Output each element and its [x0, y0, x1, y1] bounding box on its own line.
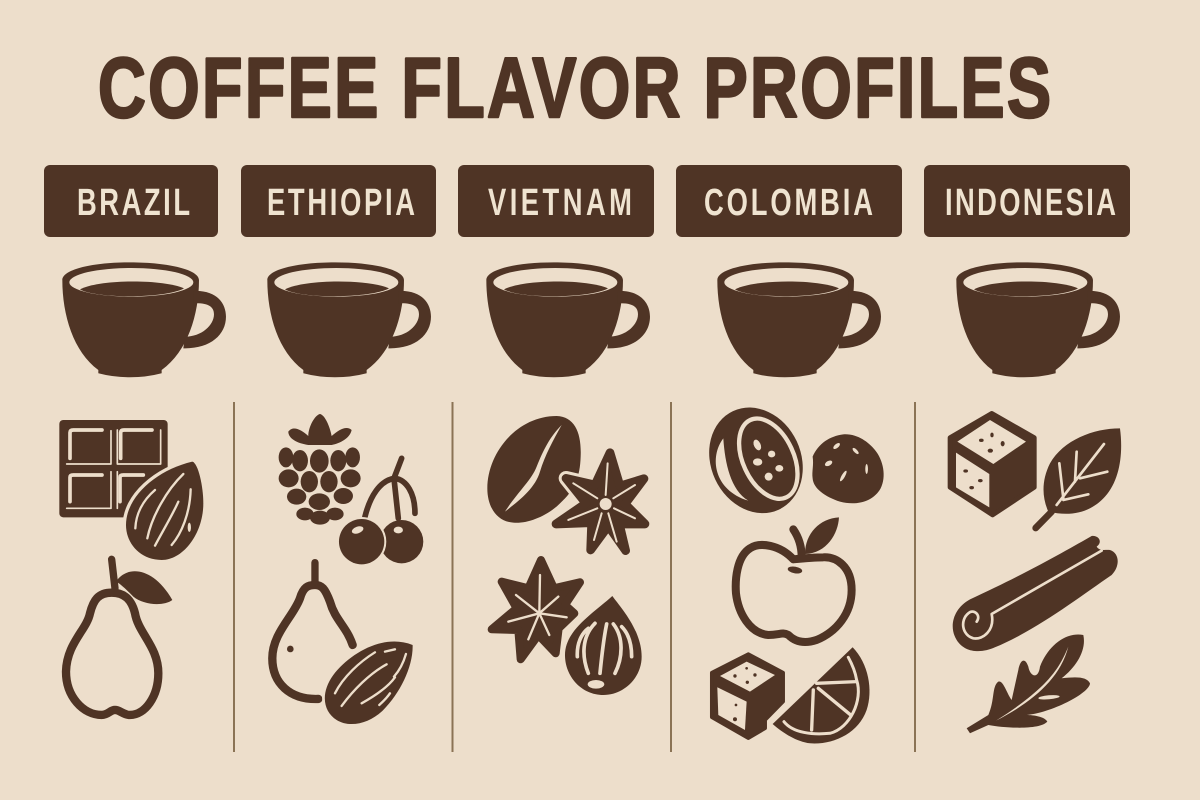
icon: apple	[736, 517, 852, 642]
icon: star anise	[556, 453, 645, 551]
panel: Indonesia	[924, 165, 1130, 733]
label: Indonesia	[924, 165, 1130, 237]
icon: coffee bean	[487, 416, 581, 523]
label: Vietnam: VIETNAM	[488, 182, 632, 224]
icon: pear	[66, 559, 172, 715]
panel: Ethiopia	[241, 165, 436, 724]
icon: almond	[325, 642, 413, 724]
icon: almond	[126, 462, 203, 560]
panel: Brazil	[44, 165, 226, 715]
label: Vietnam	[458, 165, 654, 237]
panel: Vietnam	[458, 165, 654, 695]
panel: Colombia	[676, 165, 902, 743]
icon: hazelnut	[565, 596, 642, 695]
icon: cherries	[339, 458, 423, 564]
icon: coffee cup	[267, 262, 431, 377]
icon: coffee cup	[956, 262, 1120, 377]
icon: passion fruit	[692, 392, 820, 529]
label: Colombia	[676, 165, 902, 237]
label: Ethiopia: ETHIOPIA	[267, 182, 415, 224]
label: Colombia: COLOMBIA	[704, 182, 873, 224]
icon: coffee cup	[486, 262, 650, 377]
icon: raspberry	[279, 414, 361, 525]
icon: orange slice	[773, 647, 870, 743]
icon: coffee cup	[717, 262, 881, 377]
icon: sugar cube	[950, 413, 1034, 515]
label: Brazil	[44, 165, 218, 237]
icon: pear	[272, 563, 353, 699]
label: Indonesia: INDONESIA	[945, 182, 1116, 224]
icon: nut	[812, 434, 884, 503]
icon: sugar cube	[712, 654, 783, 738]
label: Brazil: BRAZIL	[77, 182, 190, 224]
label: Ethiopia	[241, 165, 436, 237]
icon: leaf	[1036, 428, 1121, 528]
icon: coffee cup	[62, 262, 226, 377]
title: COFFEE FLAVOR PROFILES	[98, 41, 1051, 136]
icon: cinnamon stick	[953, 536, 1118, 651]
icon: herb leaf	[967, 634, 1090, 733]
icon: star anise	[492, 560, 580, 659]
icon: chocolate bar	[59, 420, 168, 517]
